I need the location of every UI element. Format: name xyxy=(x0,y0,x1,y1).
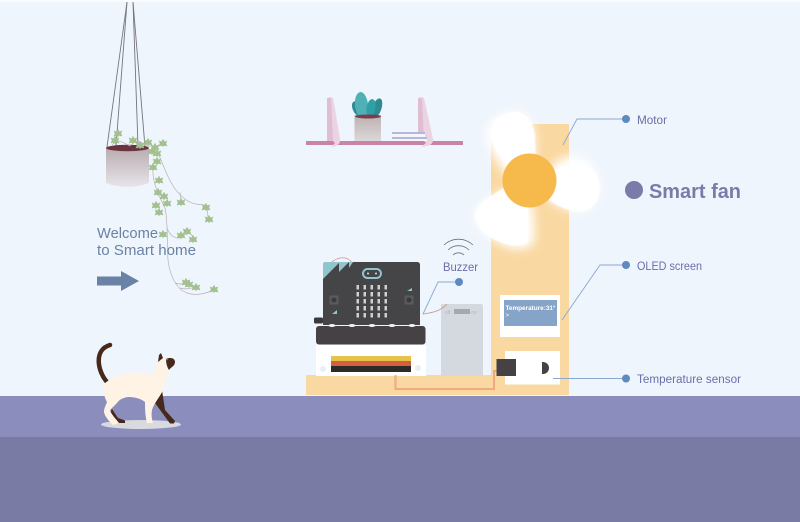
temperature wire xyxy=(396,371,497,389)
cat body xyxy=(104,360,167,425)
motor callout: Motor xyxy=(637,115,667,127)
fan blades xyxy=(475,112,600,246)
temperature callout xyxy=(553,374,741,386)
OLED screen: Temperature:31° xyxy=(506,305,556,312)
LED matrix xyxy=(356,285,387,318)
OLED screen xyxy=(500,295,560,337)
left bookend xyxy=(327,98,340,147)
icon: arrow xyxy=(97,271,139,291)
wires on top xyxy=(331,258,352,263)
micro:bit board xyxy=(314,258,426,376)
OLED callout xyxy=(562,261,702,320)
welcome text line 2: to Smart home xyxy=(97,242,196,259)
battery box: on xyxy=(471,310,477,316)
logo xyxy=(363,269,381,278)
succulent pot xyxy=(354,115,381,141)
right bookend xyxy=(418,98,433,147)
shelf with plant xyxy=(306,91,463,147)
ribbon cable xyxy=(331,356,411,362)
succulent leaves xyxy=(349,91,384,119)
fan blades glow xyxy=(475,112,599,249)
teal corners xyxy=(323,262,340,279)
motor callout xyxy=(563,115,667,145)
temperature callout: Temperature sensor xyxy=(637,374,741,386)
connector bar xyxy=(316,326,426,344)
icon: fan xyxy=(475,112,600,249)
base board xyxy=(306,124,569,395)
cat xyxy=(99,345,181,429)
wall background xyxy=(0,0,800,397)
floor xyxy=(0,396,800,522)
pot xyxy=(106,145,149,187)
vines xyxy=(112,141,213,294)
buttons xyxy=(330,296,338,304)
smart fan title: Smart fan xyxy=(649,181,741,203)
icon: sound waves xyxy=(444,239,473,255)
ropes xyxy=(107,2,145,147)
ivy leaves xyxy=(111,129,218,293)
OLED callout: OLED screen xyxy=(637,261,702,273)
far legs xyxy=(109,409,125,423)
books xyxy=(392,132,427,141)
battery box: off xyxy=(445,310,451,316)
fan hub xyxy=(502,154,556,208)
cat head xyxy=(158,353,175,370)
board xyxy=(323,262,420,325)
welcome text: Welcome xyxy=(97,225,158,242)
cat shadow xyxy=(101,420,181,429)
temperature sensor xyxy=(496,351,560,384)
buzzer callout xyxy=(423,278,463,314)
OLED screen: > xyxy=(506,313,510,319)
expansion board xyxy=(316,345,426,376)
battery box xyxy=(423,304,483,376)
shelf board xyxy=(306,141,463,145)
hanging plant xyxy=(106,2,218,294)
tail xyxy=(99,345,110,382)
buzzer label: Buzzer xyxy=(443,260,478,274)
